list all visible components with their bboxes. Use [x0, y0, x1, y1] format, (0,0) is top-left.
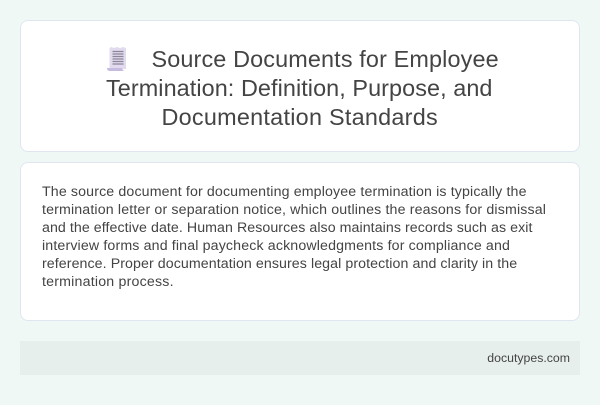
description text: and the effective date. Human Resources also maintains records such as exit: [42, 220, 532, 236]
description text: [42, 184, 546, 290]
description text: termination letter or separation notice, which outlines the reasons for dismissal: [42, 202, 546, 218]
description text: reference. Proper documentation ensures legal protection and clarity in the: [42, 256, 517, 272]
footer source text: docutypes.com: [487, 351, 570, 365]
panel: description card: [20, 162, 580, 321]
title: Source Documents for Employee: [152, 46, 499, 72]
title: [106, 46, 499, 130]
panel: title card: [20, 20, 580, 152]
icon: document scroll: [107, 47, 126, 71]
title: Documentation Standards: [162, 104, 438, 130]
footer bar: [20, 341, 580, 375]
description text: The source document for documenting employee termination is typically the: [42, 184, 527, 200]
description text: termination process.: [42, 274, 174, 290]
title: Termination: Definition, Purpose, and: [106, 75, 493, 101]
description text: interview forms and final paycheck acknowledgments for compliance and: [42, 238, 510, 254]
